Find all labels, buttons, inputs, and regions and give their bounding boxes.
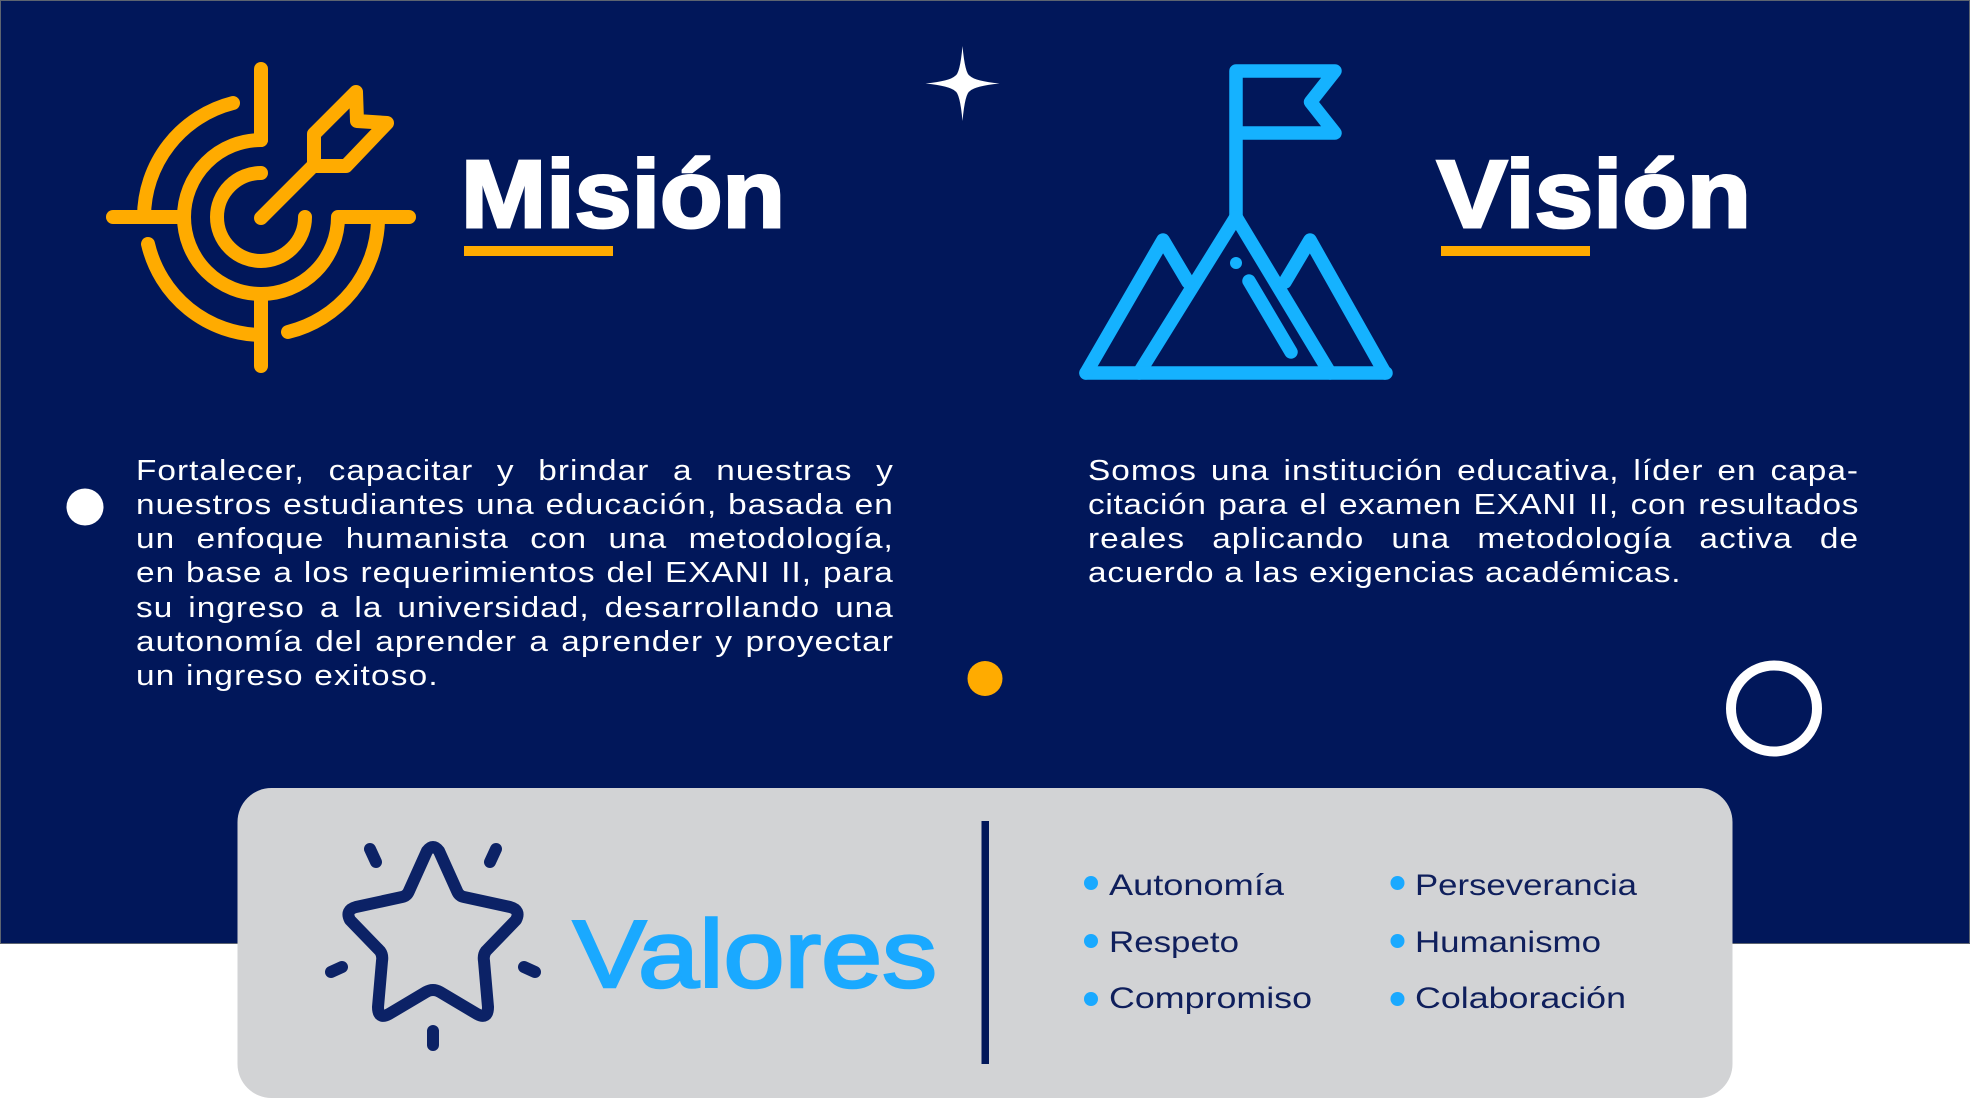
- text block: visión: citación para el examen EXANI II, con resultados: [1088, 489, 1859, 521]
- divider: [982, 821, 989, 1064]
- text block: misión: [136, 454, 894, 692]
- heading: Visión: Visión: [1437, 141, 1751, 248]
- panel: valores: [238, 788, 1732, 1098]
- decorative white dot: [66, 488, 104, 526]
- underline: Visión: [1441, 246, 1590, 256]
- text block: misión: autonomía del aprender a aprender y proyectar: [136, 626, 894, 658]
- text block: visión: acuerdo a las exigencias académicas.: [1088, 557, 1681, 589]
- item: Colaboración: Colaboración: [1415, 982, 1626, 1015]
- text block: visión: [1088, 454, 1859, 589]
- icon: target with arrow: [113, 69, 409, 366]
- underline: Misión: [464, 246, 613, 256]
- icon: shining star: [331, 847, 535, 1045]
- list: values column one: [1084, 869, 1312, 1015]
- text block: visión: reales aplicando una metodología activa de: [1088, 523, 1859, 555]
- icon: four-point star: [926, 46, 1000, 121]
- item: Autonomía: Autonomía: [1109, 869, 1284, 902]
- heading: Misión: Misión: [461, 141, 785, 248]
- panel background: [238, 788, 1732, 1098]
- icon: flag on mountain: [1086, 71, 1386, 373]
- item: Compromiso: Compromiso: [1109, 982, 1312, 1015]
- list: values column two: [1390, 869, 1637, 1015]
- text block: misión: un enfoque humanista con una metodología,: [136, 523, 894, 555]
- heading: Valores: Valores: [573, 901, 937, 1008]
- text block: misión: en base a los requerimientos del EXANI II, para: [136, 557, 894, 589]
- text block: misión: un ingreso exitoso.: [136, 660, 439, 692]
- text block: misión: Fortalecer, capacitar y brindar a nuestras y: [136, 454, 894, 486]
- item: Humanismo: Humanismo: [1415, 926, 1601, 959]
- text block: visión: Somos una institución educativa, líder en capa-: [1088, 454, 1859, 486]
- text block: misión: nuestros estudiantes una educación, basada en: [136, 489, 894, 521]
- item: Perseverancia: Perseverancia: [1415, 869, 1637, 902]
- decorative white ring: [1731, 666, 1817, 752]
- item: Respeto: Respeto: [1109, 926, 1239, 959]
- text block: misión: su ingreso a la universidad, desarrollando una: [136, 592, 894, 624]
- decorative orange dot: [968, 661, 1002, 696]
